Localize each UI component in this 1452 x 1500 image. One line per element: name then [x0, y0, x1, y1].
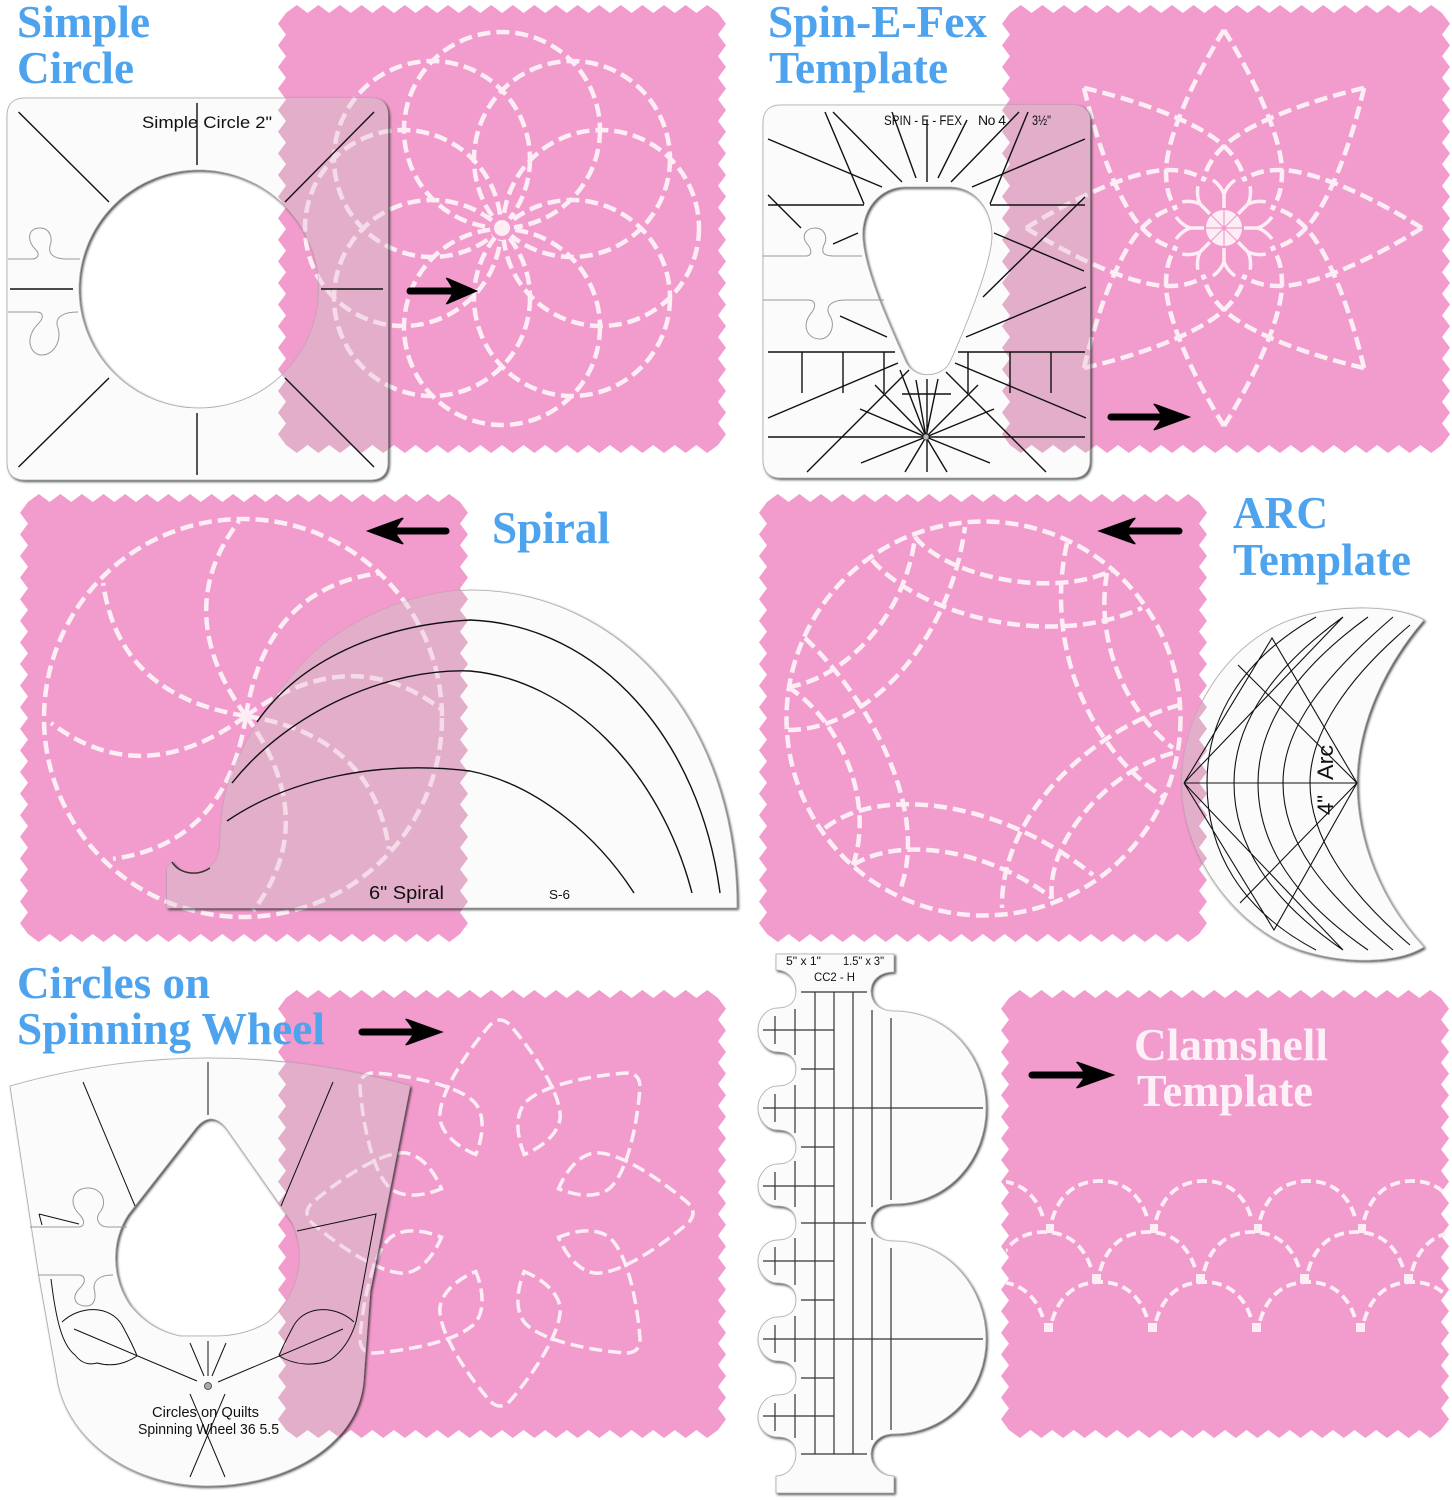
panel: Clamshell Template [758, 954, 1452, 1493]
template labels: CC2 - H [814, 970, 855, 984]
arrow: pointing right [1107, 404, 1191, 430]
fabric swatch: Spiral [20, 494, 468, 942]
template labels [786, 954, 884, 984]
template guide lines [39, 1062, 376, 1477]
panel: Simple Circle [7, 0, 726, 480]
arrow: pointing right [1028, 1062, 1115, 1088]
template labels: 5" x 1" [786, 954, 821, 968]
template label [138, 1404, 279, 1438]
heading: ARC Template: ARC [1233, 487, 1328, 538]
template pivot hole [204, 1382, 212, 1390]
template: Simple Circle 2 inch [6, 97, 392, 484]
heading: Spin-E-Fex Template: Template [769, 42, 948, 93]
template: 6 inch Spiral [166, 589, 741, 912]
heading: Spiral: Spiral [492, 502, 610, 553]
template label [1313, 745, 1338, 815]
template notch shadow [172, 862, 210, 873]
template label: Arc [1313, 745, 1338, 780]
template label [884, 112, 1051, 128]
heading: Circles on Spinning Wheel: Circles on [17, 957, 210, 1008]
template puzzle notches [8, 228, 80, 355]
fabric swatch: ARC [759, 494, 1207, 942]
template labels: S-6 [549, 887, 570, 902]
template labels: 1.5" x 3" [843, 954, 884, 968]
template puzzle notches [763, 228, 884, 339]
panel: Circles on Spinning Wheel [10, 957, 726, 1486]
fabric swatch: Simple Circle [278, 5, 726, 453]
heading: Simple Circle: Circle [17, 42, 134, 93]
template label: SPIN - E - FEX [884, 112, 963, 128]
template label: Spinning Wheel 36 5.5 [138, 1421, 279, 1438]
panel: ARC Template [759, 487, 1424, 960]
arrow: pointing left [1097, 518, 1183, 544]
template guide lines [1184, 617, 1410, 950]
template label: Simple Circle 2" [142, 113, 272, 132]
heading: Clamshell Template: Clamshell [1134, 1019, 1328, 1070]
stitched eight-point star [1026, 30, 1422, 426]
template pivot hole [923, 434, 929, 440]
panel: Spiral [20, 494, 737, 942]
template labels: 6" Spiral [369, 883, 444, 903]
arrow: pointing right [358, 1019, 444, 1045]
heading: Circles on Spinning Wheel: Spinning Wheel [17, 1003, 325, 1054]
template ruler grid [763, 992, 983, 1454]
stitched clamshell rows [1006, 1179, 1446, 1332]
template label: Circles on Quilts [152, 1404, 259, 1421]
template labels [369, 883, 570, 903]
template label: 4" [1313, 795, 1338, 815]
heading: ARC Template: Template [1233, 534, 1411, 585]
stitched rosette: overlapping circles [305, 32, 699, 425]
heading: Clamshell Template: Template [1137, 1065, 1313, 1116]
template: Spin-E-Fex No 4 [762, 104, 1094, 482]
template guide arcs [227, 620, 720, 893]
panel: Spin-E-Fex Template [763, 0, 1450, 478]
fabric swatch: Spin-E-Fex [1002, 5, 1450, 453]
template puzzle notches [30, 1188, 127, 1306]
fabric swatch: Clamshell [1001, 990, 1449, 1438]
stitched pinwheel spiral [44, 519, 442, 917]
template: 4 inch Arc [1181, 607, 1428, 964]
fabric swatch: Spinning Wheel [278, 990, 726, 1438]
stitched flower petals [307, 1020, 693, 1406]
arrow: pointing right [407, 278, 478, 304]
template label: No 4 [978, 112, 1006, 128]
stitched double wedding ring [786, 522, 1180, 916]
arrow: pointing left [366, 518, 450, 544]
template: Spinning Wheel 36 5.5 [10, 1057, 414, 1490]
template guide lines [768, 112, 1086, 472]
template: CC2-H clamshell ruler [758, 954, 986, 1493]
template label: 3½" [1032, 112, 1051, 128]
template guide lines [10, 103, 383, 475]
